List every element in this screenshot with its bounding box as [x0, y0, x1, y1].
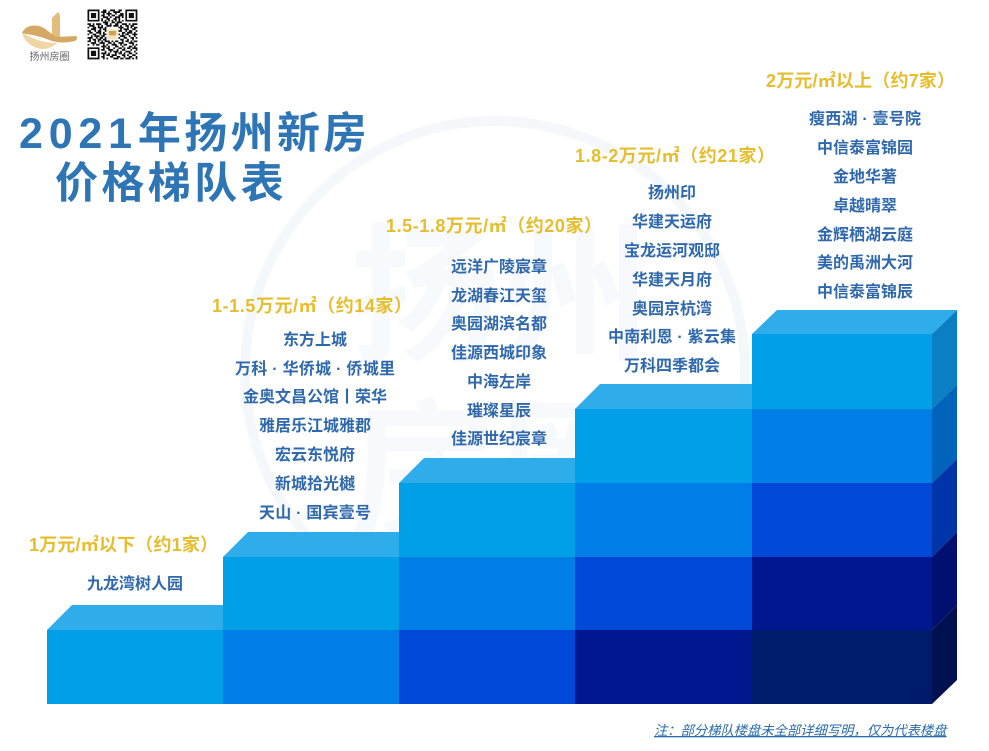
tier 4 projects: 华建天月府: [632, 270, 712, 289]
tier 5 projects: 金辉栖湖云庭: [817, 225, 913, 244]
tier 3 projects: [451, 257, 547, 448]
tier 5 projects: 美的禹洲大河: [817, 253, 913, 272]
tier 4 projects: 宝龙运河观邸: [624, 241, 720, 260]
tier 2 projects: 天山 · 国宾壹号: [259, 503, 371, 522]
tier 5 projects: 中信泰富锦辰: [817, 282, 913, 301]
watermark: 扬州: [350, 214, 650, 382]
title: 2021年扬州新房: [19, 110, 370, 158]
tier 3 projects: 佳源西城印象: [451, 343, 547, 362]
tier 4 projects: 奥园京杭湾: [632, 299, 712, 318]
tier 2 projects: 宏云东悦府: [275, 445, 355, 464]
tier 4 heading: 1.8-2万元/㎡（约21家）: [575, 145, 775, 166]
tier 3 heading: 1.5-1.8万元/㎡（约20家）: [386, 215, 602, 236]
stair chart: [47, 310, 957, 704]
tier 1 projects: 九龙湾树人园: [87, 574, 183, 593]
tier 1 heading: 1万元/㎡以下（约1家）: [29, 534, 218, 555]
tier 3 projects: 奥园湖滨名都: [451, 314, 547, 333]
tier 2 heading: 1-1.5万元/㎡（约14家）: [212, 295, 412, 316]
watermark: 房圈: [350, 389, 650, 557]
tier 5 projects: 中信泰富锦园: [817, 138, 913, 157]
tier 3 projects: 佳源世纪宸章: [451, 429, 547, 448]
title: [19, 110, 370, 208]
tier 4 projects: 华建天运府: [632, 212, 712, 231]
QR code: [88, 10, 137, 59]
step 4 block: [575, 384, 777, 704]
tier 2 projects: 万科 · 华侨城 · 侨城里: [235, 359, 395, 378]
tier 2 projects: 新城拾光樾: [275, 474, 355, 493]
tier 5 projects: 金地华著: [833, 167, 897, 186]
logo: 扬州房圈: [22, 12, 77, 63]
tier 5 projects: [809, 109, 921, 301]
watermark: [245, 121, 745, 621]
tier 3 projects: 龙湖春江天玺: [451, 286, 547, 305]
tier 4 projects: [608, 184, 736, 375]
footnote: 注：部分梯队楼盘未全部详细写明，仅为代表楼盘: [654, 723, 948, 738]
tier 3 projects: 中海左岸: [467, 373, 531, 391]
tier 2 projects: [235, 330, 395, 522]
tier 4 projects: 中南利恩 · 紫云集: [608, 327, 736, 346]
tier 5 heading: 2万元/㎡以上（约7家）: [766, 70, 955, 91]
tier 4 projects: 扬州印: [648, 184, 696, 202]
tier 5 projects: 卓越晴翠: [833, 196, 897, 215]
tier 3 projects: 远洋广陵宸章: [451, 257, 547, 276]
step 1 block: [47, 605, 248, 704]
tier 3 projects: 璀璨星辰: [467, 402, 531, 420]
tier 4 projects: 万科四季都会: [624, 356, 720, 375]
tier 2 projects: 雅居乐江城雅郡: [259, 416, 371, 435]
step 5 block: [752, 310, 957, 704]
tier 2 projects: 金奥文昌公馆丨荣华: [243, 387, 387, 406]
tier 2 projects: 东方上城: [283, 330, 347, 349]
step 3 block: [399, 458, 600, 704]
step 2 block: [223, 532, 424, 704]
tier 5 projects: 瘦西湖 · 壹号院: [809, 109, 921, 128]
title: 价格梯队表: [55, 160, 287, 208]
logo: 扬州房圈: 扬州房圈: [30, 50, 70, 63]
